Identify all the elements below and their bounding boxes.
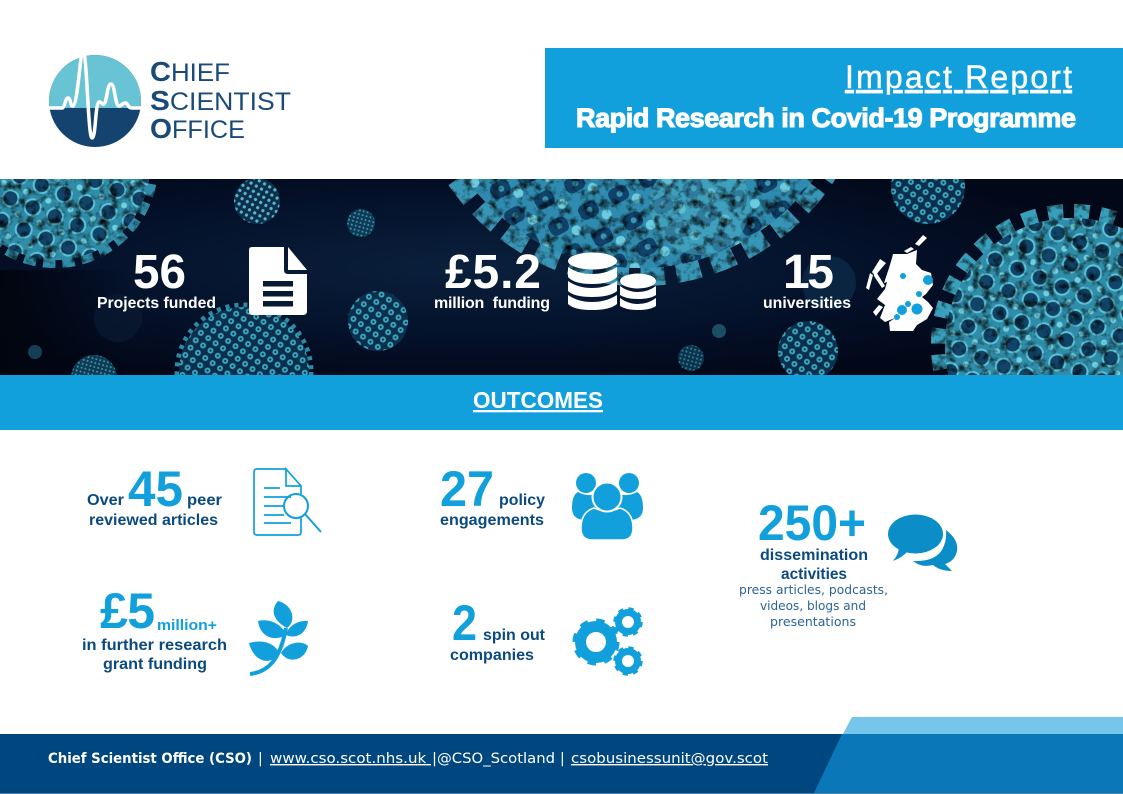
outcome: dissemination activities: dissemination xyxy=(760,547,868,564)
outcome: further research grant funding: £5 xyxy=(100,583,155,639)
stat: universities: universities xyxy=(763,295,851,312)
icon: document with magnifier xyxy=(254,469,321,535)
outcomes heading band: OUTCOMES xyxy=(473,387,603,413)
outcomes heading band xyxy=(0,375,1123,430)
icon: leaf sprig xyxy=(249,601,308,674)
stat: projects funded: 56 xyxy=(133,246,186,299)
outcome: peer reviewed articles: 45 xyxy=(128,461,183,517)
title panel xyxy=(545,48,1123,148)
outcome: dissemination activities: 250+ xyxy=(758,495,866,551)
dissemination details: press articles, podcasts, xyxy=(739,582,888,597)
footer contact text: | xyxy=(258,751,263,767)
outcome: policy engagements xyxy=(440,461,545,529)
logo wordmark: OFFICE xyxy=(150,113,245,144)
icon: coin stacks xyxy=(568,252,656,310)
footer xyxy=(0,717,1123,794)
icon: map of Scotland xyxy=(866,235,933,331)
key figures banner xyxy=(0,0,1123,477)
stat: universities: 15 xyxy=(783,246,834,299)
dissemination details: videos, blogs and xyxy=(760,598,866,613)
logo wordmark xyxy=(150,56,291,144)
stat: million funding: million funding xyxy=(434,295,550,312)
outcome: spin out companies: spin out xyxy=(483,627,546,644)
icon: speech bubbles xyxy=(888,514,957,571)
virus background image xyxy=(0,0,1123,477)
icon: group of people xyxy=(572,473,643,540)
outcome: dissemination activities xyxy=(739,495,888,629)
outcome: policy engagements: policy xyxy=(499,492,545,509)
icon: document xyxy=(249,247,307,315)
report title: Impact Report xyxy=(845,59,1072,95)
logo wordmark: SCIENTIST xyxy=(150,85,291,116)
programme subtitle: Rapid Research in Covid-19 Programme xyxy=(576,103,1076,133)
dissemination details: presentations xyxy=(770,614,856,629)
outcome: further research grant funding: million+ xyxy=(157,617,217,634)
outcome: spin out companies xyxy=(450,595,546,664)
stat: universities xyxy=(763,246,851,312)
footer contact text: |@CSO_Scotland xyxy=(432,751,555,767)
outcome: spin out companies: companies xyxy=(450,647,534,664)
stat: million funding: £5.2 xyxy=(445,246,541,299)
outcome: policy engagements: engagements xyxy=(440,512,544,529)
stat: million funding xyxy=(434,246,550,312)
logo: Chief Scientist Office xyxy=(46,50,291,147)
stat: projects funded xyxy=(97,246,216,312)
footer contact text xyxy=(48,751,769,767)
dissemination details xyxy=(739,582,888,629)
outcome: peer reviewed articles: peer xyxy=(187,492,222,509)
icon: gears xyxy=(575,609,641,674)
outcome: dissemination activities: activities xyxy=(781,566,847,583)
footer contact text: | xyxy=(560,751,565,767)
outcome: peer reviewed articles: reviewed articles xyxy=(89,512,218,529)
logo wordmark: CHIEF xyxy=(150,56,230,87)
outcome: peer reviewed articles: Over xyxy=(87,492,124,509)
outcome: further research grant funding xyxy=(82,583,227,673)
footer contact text: Chief Scientist Office (CSO) xyxy=(48,751,252,767)
outcome: peer reviewed articles xyxy=(87,461,222,529)
footer contact text: www.cso.scot.nhs.uk xyxy=(270,751,431,767)
logo emblem xyxy=(49,55,141,147)
footer contact text: csobusinessunit@gov.scot xyxy=(571,751,769,767)
outcome: policy engagements: 27 xyxy=(440,461,494,517)
outcome: further research grant funding: in further research xyxy=(82,637,227,654)
outcome: further research grant funding: grant funding xyxy=(103,656,207,673)
outcome: spin out companies: 2 xyxy=(452,595,477,651)
footer shapes xyxy=(0,717,1123,794)
stat: projects funded: Projects funded xyxy=(97,295,216,312)
